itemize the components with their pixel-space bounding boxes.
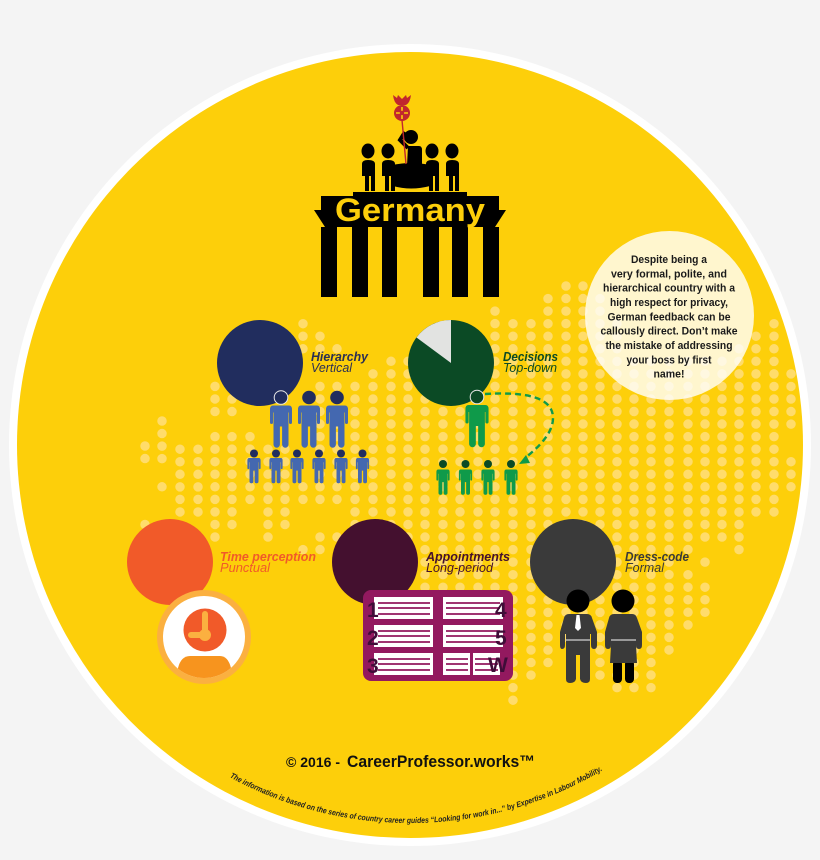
callout: feedback note: callously direct. Don’t make: [600, 326, 738, 338]
panel: decisions: [408, 320, 558, 495]
label: time perception punctual: [220, 549, 316, 575]
icon: weekly planner: 1: [367, 599, 379, 622]
label: time perception punctual: Punctual: [220, 560, 271, 575]
callout: feedback note: Despite being a: [631, 254, 708, 266]
circle: dress-code: [530, 519, 616, 605]
heading: Germany: Germany: [335, 192, 485, 228]
icon: four team members: [436, 460, 518, 495]
label: hierarchy vertical: Vertical: [311, 360, 353, 375]
panel: time perception: [127, 519, 316, 690]
pie chart: decisions: [408, 320, 494, 406]
callout: feedback note: hierarchical country with a: [603, 283, 736, 295]
icon: green leader: [465, 390, 489, 447]
label: dress-code formal: [625, 549, 689, 575]
panel: dress-code: [530, 519, 689, 683]
label: hierarchy vertical: Hierarchy: [311, 349, 369, 364]
label: appointments long-period: Long-period: [426, 560, 494, 575]
label: appointments long-period: Appointments: [425, 549, 510, 564]
callout: feedback note: German feedback can be: [608, 311, 730, 323]
label: dress-code formal: Formal: [625, 560, 665, 575]
label: decisions top-down: [503, 349, 558, 375]
icon: woman in dress: [605, 590, 642, 683]
icon: weekly planner: 2: [367, 627, 379, 650]
label: appointments long-period: [425, 549, 510, 575]
icon: man in suit: [560, 590, 597, 683]
icon: red wreath and eagle standard: [393, 95, 411, 164]
label: decisions top-down: Decisions: [503, 349, 558, 364]
callout: feedback note: [585, 231, 754, 400]
icon: six employees: [247, 450, 369, 483]
label: decisions top-down: Top-down: [503, 360, 557, 375]
circle: appointments: [332, 519, 418, 605]
callout: feedback note: very formal, polite, and: [611, 268, 727, 280]
icon: weekly planner: 4: [495, 599, 507, 622]
source note on curved path: The information is based on the series of country career guides “Looking for work in...” by Expertise in Labour Mobility.: [230, 767, 602, 825]
arrow: dashed curve from leader to team: [485, 393, 553, 464]
icon: clock badge: [157, 590, 251, 690]
icon: quadriga figures: [362, 130, 459, 191]
panel: hierarchy: [217, 320, 369, 483]
callout: feedback note: high respect for privacy,: [610, 297, 728, 309]
callout: feedback note: your boss by first: [626, 354, 712, 366]
circle: time perception: [127, 519, 213, 605]
dotted world map: [145, 286, 791, 701]
panel: appointments: [332, 519, 513, 681]
title: Brandenburg gate with Germany: [314, 95, 506, 297]
label: time perception punctual: Time perception: [220, 549, 316, 564]
icon: weekly planner: 5: [495, 627, 507, 650]
icon: three managers: [270, 391, 348, 448]
callout: feedback note: the mistake of addressing: [606, 340, 732, 352]
icon: weekly planner: 3: [367, 655, 379, 678]
label: hierarchy vertical: [311, 349, 369, 375]
copyright line: CareerProfessor.works™: [347, 753, 535, 771]
circle: hierarchy: [217, 320, 303, 406]
label: dress-code formal: Dress-code: [625, 549, 689, 564]
icon: weekly planner: W: [488, 654, 508, 677]
callout: feedback note: name!: [654, 369, 684, 381]
icon: gate structure: [314, 192, 506, 297]
copyright line: © 2016 -: [286, 754, 340, 770]
icon: weekly planner: [363, 590, 513, 681]
